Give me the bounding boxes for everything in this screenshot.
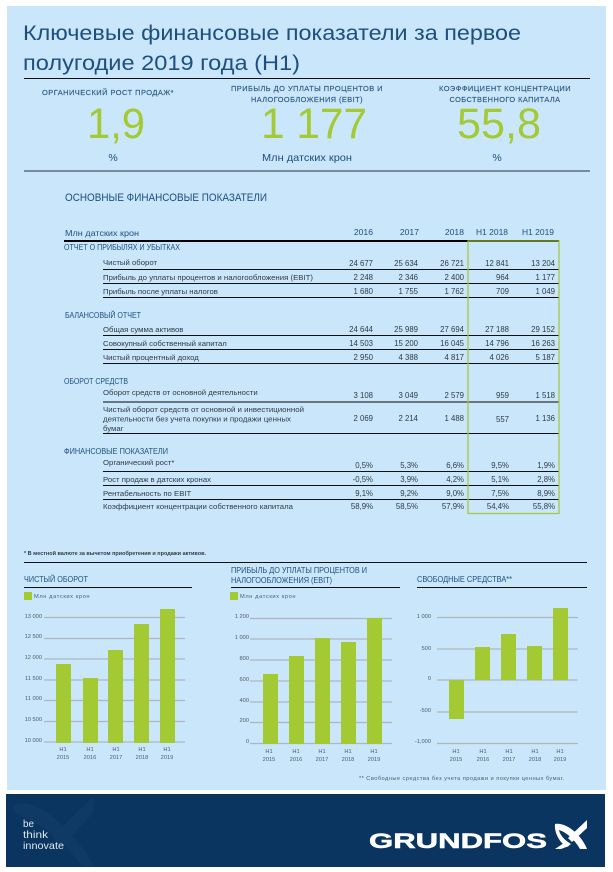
period labels: H1 <box>556 749 564 755</box>
KPI: EBIT <box>231 84 383 164</box>
period labels: H1 <box>318 749 326 755</box>
title: полугодие 2019 года (H1) <box>23 51 300 75</box>
section: income statement: 12 841 <box>485 259 509 268</box>
table header: H1 2018 <box>476 227 508 237</box>
KPI: organic growth: % <box>108 152 118 164</box>
section: balance sheet: 14 796 <box>485 339 509 348</box>
section: income statement: 2 346 <box>398 273 418 282</box>
section: ratios: Органический рост* <box>103 458 174 467</box>
H1 highlight box <box>468 241 559 514</box>
section: balance sheet: 4 388 <box>398 353 418 362</box>
section: ratios: 9,5% <box>491 461 509 470</box>
axis labels: 0 <box>428 676 431 682</box>
axis labels: -500 <box>420 708 431 714</box>
section: income statement: 26 721 <box>440 259 464 268</box>
axis labels: 500 <box>422 646 431 652</box>
period labels: H1 <box>505 749 513 755</box>
KPI: equity ratio: 55,8 <box>457 100 541 148</box>
axis labels: 0 <box>246 739 249 745</box>
axis labels: 10 000 <box>25 738 42 744</box>
section: income statement: 1 755 <box>398 287 419 296</box>
axis labels: 12 500 <box>25 634 42 640</box>
chart: net turnover: ЧИСТЫЙ ОБОРОТ <box>24 573 89 584</box>
section: cash flow: 2 069 <box>353 414 373 423</box>
section: cash flow: ОБОРОТ СРЕДСТВ <box>64 377 128 386</box>
section: ratios: 57,9% <box>442 502 464 511</box>
logo symbol <box>555 820 587 849</box>
axis labels: 1 000 <box>235 635 249 641</box>
bars <box>263 618 382 744</box>
section: ratios: 2,8% <box>537 475 555 484</box>
tagline <box>23 818 64 852</box>
chart: net turnover <box>24 573 192 761</box>
section: ratios: 7,5% <box>491 489 509 498</box>
section: balance sheet: Общая сумма активов <box>103 325 183 334</box>
section: balance sheet: 27 188 <box>485 325 509 334</box>
section: cash flow: 3 108 <box>353 391 373 400</box>
financial table <box>64 227 559 514</box>
period labels: 2017 <box>110 755 122 761</box>
period labels: 2018 <box>529 757 541 763</box>
period labels: 2016 <box>84 755 96 761</box>
section: ratios: 9,1% <box>355 489 373 498</box>
period labels: 2018 <box>136 755 148 761</box>
axis labels: -1,000 <box>415 739 431 745</box>
axis labels: 12 000 <box>25 655 42 661</box>
section: ratios: 9,0% <box>446 489 464 498</box>
section: income statement: 964 <box>496 273 510 282</box>
section: balance sheet: 27 694 <box>440 325 465 334</box>
period labels: H1 <box>59 747 67 753</box>
section: ratios: 0,5% <box>355 461 373 470</box>
period labels: 2015 <box>450 757 462 763</box>
section: income statement: Прибыль после уплаты налогов <box>103 287 218 296</box>
period labels: H1 <box>531 749 539 755</box>
section: income statement: ОТЧЕТ О ПРИБЫЛЯХ И УБЫТКАХ <box>64 243 181 252</box>
section: income statement: Прибыль до уплаты процентов и налогообложения (EBIT) <box>103 273 313 282</box>
axis labels: 13 000 <box>25 614 42 620</box>
section: ratios: ФИНАНСОВЫЕ ПОКАЗАТЕЛИ <box>64 447 168 456</box>
section: income statement: 1 762 <box>444 287 464 296</box>
axis labels: 11 500 <box>25 676 42 682</box>
section: balance sheet: БАЛАНСОВЫЙ ОТЧЕТ <box>65 311 141 320</box>
period labels: H1 <box>138 747 146 753</box>
period labels: H1 <box>86 747 94 753</box>
KPI: equity ratio: % <box>492 152 502 164</box>
period labels <box>263 749 380 763</box>
section: balance sheet: 29 152 <box>531 325 555 334</box>
tagline: think <box>23 829 49 841</box>
section: balance sheet: 2 950 <box>353 353 374 362</box>
section: income statement: 24 677 <box>349 259 373 268</box>
section: ratios: -0,5% <box>353 475 373 484</box>
section: income statement: Чистый оборот <box>103 258 157 267</box>
section: ratios: 55,8% <box>533 502 555 511</box>
period labels: H1 <box>479 749 487 755</box>
table header: H1 2019 <box>522 227 554 237</box>
period labels: H1 <box>292 749 300 755</box>
period labels: 2019 <box>161 755 173 761</box>
table header <box>65 227 554 238</box>
section: balance sheet: 16 045 <box>440 339 465 348</box>
watermark symbol <box>13 796 94 867</box>
period labels: 2015 <box>57 755 69 761</box>
axis labels: 200 <box>240 718 249 724</box>
legend: Млн датских крон <box>34 594 90 600</box>
footnote: free cash flow: ** Свободные средства без учета продажи и покупки ценных бумаг. <box>359 776 564 782</box>
tagline: innovate <box>23 840 64 852</box>
period labels: H1 <box>344 749 352 755</box>
section: income statement: 1 049 <box>535 287 555 296</box>
section: balance sheet <box>65 311 559 364</box>
section: balance sheet: 4 817 <box>444 353 464 362</box>
section: balance sheet: 4 026 <box>489 353 509 362</box>
KPI: EBIT: Млн датских крон <box>262 152 352 164</box>
KPI: equity ratio: КОЭФФИЦИЕНТ КОНЦЕНТРАЦИИ <box>439 84 571 93</box>
section: balance sheet: 25 989 <box>394 325 418 334</box>
section: cash flow: 1 136 <box>535 414 555 423</box>
section: cash flow: бумаг <box>103 424 124 433</box>
section: income statement: 2 400 <box>444 273 465 282</box>
section: ratios: 9,2% <box>400 489 418 498</box>
chart: EBIT: НАЛОГООБЛОЖЕНИЯ (EBIT) <box>231 575 332 585</box>
KPI: equity ratio: СОБСТВЕННОГО КАПИТАЛА <box>450 95 560 104</box>
legend <box>24 592 90 600</box>
section: ratios: 58,9% <box>351 502 373 511</box>
axis labels: 800 <box>240 656 249 662</box>
table heading: ОСНОВНЫЕ ФИНАНСОВЫЕ ПОКАЗАТЕЛИ <box>65 192 267 204</box>
section: balance sheet: Чистый процентный доход <box>103 353 199 362</box>
section: income statement: 1 177 <box>535 273 555 282</box>
section: ratios: Рентабельность по EBIT <box>103 489 192 498</box>
chart: free cash flow: СВОБОДНЫЕ СРЕДСТВА** <box>417 574 513 584</box>
axis labels <box>415 614 431 745</box>
section: cash flow: 3 049 <box>398 391 418 400</box>
period labels: H1 <box>112 747 120 753</box>
axis labels: 1 000 <box>417 614 431 620</box>
section: ratios: Коэффициент концентрации собственного капитала <box>103 502 294 511</box>
chart: EBIT <box>230 565 400 763</box>
KPI: equity ratio <box>439 84 571 164</box>
period labels: 2019 <box>368 757 380 763</box>
axis labels <box>235 614 249 745</box>
section: ratios: 6,6% <box>446 461 464 470</box>
chart: free cash flow <box>415 574 587 763</box>
logo wordmark: GRUNDFOS <box>369 830 547 853</box>
bars <box>56 609 175 743</box>
period labels: 2016 <box>477 757 489 763</box>
section: ratios: 5,1% <box>491 475 509 484</box>
period labels: H1 <box>265 749 273 755</box>
KPI: EBIT: 1 177 <box>261 100 367 148</box>
section: balance sheet: Совокупный собственный капитал <box>103 339 227 348</box>
axis labels: 600 <box>240 677 249 683</box>
period labels: 2017 <box>316 757 328 763</box>
section: balance sheet: 16 263 <box>531 339 555 348</box>
section: balance sheet: 5 187 <box>535 353 555 362</box>
section: cash flow <box>64 377 559 434</box>
chart: EBIT: ПРИБЫЛЬ ДО УПЛАТЫ ПРОЦЕНТОВ И <box>231 565 367 575</box>
footnote: * В местной валюте за вычетом приобретения и продажи активов. <box>24 550 206 557</box>
period labels: 2019 <box>554 757 566 763</box>
section: cash flow: 2 214 <box>398 414 419 423</box>
section: ratios: 5,3% <box>400 461 418 470</box>
axis labels <box>25 614 42 744</box>
legend <box>230 592 296 600</box>
axis labels: 400 <box>240 698 249 704</box>
section: balance sheet: 15 200 <box>394 339 419 348</box>
section: income statement <box>64 243 559 298</box>
period labels: 2018 <box>342 757 354 763</box>
section: cash flow: 2 579 <box>444 391 464 400</box>
period labels <box>450 749 566 763</box>
section: ratios: 1,9% <box>537 461 555 470</box>
section: income statement: 13 204 <box>531 259 556 268</box>
section: cash flow: Чистый оборот средств от основной и инвестиционной <box>103 405 304 414</box>
KPI: EBIT: НАЛОГООБЛОЖЕНИЯ (EBIT) <box>251 95 363 104</box>
table header: 2017 <box>400 227 419 237</box>
section: cash flow: 1 488 <box>444 414 464 423</box>
period labels <box>57 747 173 761</box>
section: balance sheet: 14 503 <box>349 339 373 348</box>
axis labels: 11 000 <box>25 696 42 702</box>
section: ratios: 54,4% <box>487 502 509 511</box>
tagline: be <box>23 818 34 830</box>
axis labels: 10 500 <box>25 717 42 723</box>
KPI: EBIT: ПРИБЫЛЬ ДО УПЛАТЫ ПРОЦЕНТОВ И <box>231 84 383 93</box>
legend: Млн датских крон <box>240 594 296 600</box>
section: cash flow: деятельности без учета покупки и продажи ценных <box>103 414 291 424</box>
section: income statement: 709 <box>496 287 509 296</box>
table header: Млн датских крон <box>65 228 139 238</box>
section: income statement: 25 634 <box>394 259 419 268</box>
table header: 2016 <box>354 227 373 237</box>
period labels: 2016 <box>290 757 302 763</box>
period labels: 2015 <box>263 757 275 763</box>
KPI: organic growth <box>42 88 174 164</box>
section: income statement: 1 680 <box>353 287 374 296</box>
KPI: organic growth: 1,9 <box>87 100 145 148</box>
section: cash flow: 557 <box>496 415 509 424</box>
section: ratios <box>64 447 559 511</box>
section: ratios: 3,9% <box>400 475 418 484</box>
KPI: organic growth: ОРГАНИЧЕСКИЙ РОСТ ПРОДАЖ* <box>42 88 174 97</box>
footer band <box>6 794 605 867</box>
axis labels: 1 200 <box>235 614 249 620</box>
title <box>23 21 521 75</box>
period labels: H1 <box>163 747 171 753</box>
bars <box>449 608 568 719</box>
section: cash flow: Оборот средств от основной деятельности <box>103 388 258 397</box>
title: Ключевые финансовые показатели за первое <box>23 21 521 45</box>
section: cash flow: 1 518 <box>535 391 555 400</box>
table header: 2018 <box>445 227 464 237</box>
period labels: 2017 <box>503 757 515 763</box>
section: income statement: 2 248 <box>353 273 373 282</box>
section: balance sheet: 24 644 <box>349 325 374 334</box>
section: ratios: Рост продаж в датских кронах <box>103 475 211 484</box>
section: ratios: 58,5% <box>396 502 418 511</box>
section: ratios: 8,9% <box>537 489 555 498</box>
section: cash flow: 959 <box>496 391 509 400</box>
period labels: H1 <box>452 749 460 755</box>
period labels: H1 <box>370 749 378 755</box>
section: ratios: 4,2% <box>446 475 464 484</box>
